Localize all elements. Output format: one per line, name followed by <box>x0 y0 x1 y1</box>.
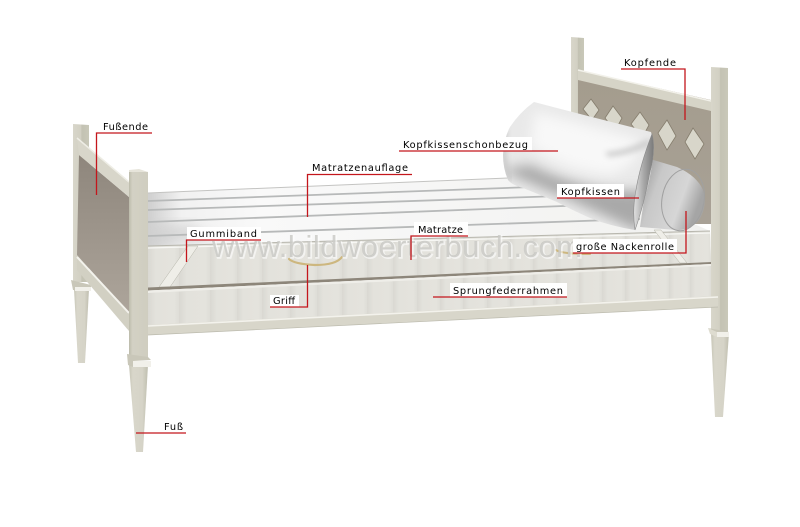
label: Fußende <box>96 122 152 195</box>
label: Kopfkissen: Kopfkissen <box>561 187 620 198</box>
watermark: www.bildwoerterbuch.com <box>212 230 583 265</box>
label: Fuß: Fuß <box>164 422 183 433</box>
side rail <box>148 296 718 335</box>
label: Kopfkissen <box>557 184 639 198</box>
label: Matratze: Matratze <box>418 225 463 236</box>
label: Fuß <box>136 422 186 433</box>
elastic strap left (Gummiband) <box>159 246 198 287</box>
headboard <box>571 37 711 230</box>
neck roll (große Nackenrolle) <box>640 159 709 234</box>
label: Kopfkissenschonbezug: Kopfkissenschonbezug <box>403 140 528 151</box>
elastic strap right <box>654 230 687 263</box>
label: Kopfende <box>621 58 685 120</box>
label: Matratze <box>411 222 468 260</box>
front-left post and foot <box>127 169 151 452</box>
footboard <box>77 138 129 331</box>
handle right <box>556 250 590 254</box>
right front post and foot <box>708 67 729 417</box>
label: große Nackenrolle: große Nackenrolle <box>576 242 674 253</box>
pillow (Kopfkissen) in pillow protector (Kopfkissenschonbezug) <box>500 102 654 232</box>
label: Griff <box>270 265 308 307</box>
mattress <box>148 230 711 288</box>
handle left (Griff) <box>289 257 342 265</box>
label: Matratzenauflage <box>308 163 412 217</box>
label: große Nackenrolle <box>573 211 686 253</box>
label: Sprungfederrahmen <box>433 283 567 297</box>
label: Sprungfederrahmen: Sprungfederrahmen <box>453 286 563 297</box>
label: Fußende: Fußende <box>103 122 148 133</box>
label: Griff: Griff <box>273 296 295 307</box>
bed illustration with labels <box>71 37 729 452</box>
label: Gummiband: Gummiband <box>190 229 257 240</box>
gap between mattress and box spring <box>148 262 711 290</box>
label: Kopfende: Kopfende <box>624 58 676 69</box>
mattress cover (Matratzenauflage) <box>148 178 710 246</box>
label: Matratzenauflage: Matratzenauflage <box>312 163 408 174</box>
label: Kopfkissenschonbezug <box>399 137 558 151</box>
box spring (Sprungfederrahmen) <box>148 264 711 325</box>
icon: diamond cut-outs <box>583 99 704 159</box>
label: Gummiband <box>186 227 261 262</box>
back-left post and foot <box>71 124 91 363</box>
pillow opening <box>634 134 654 230</box>
watermark: www.bildwoerterbuch.com <box>211 229 582 264</box>
